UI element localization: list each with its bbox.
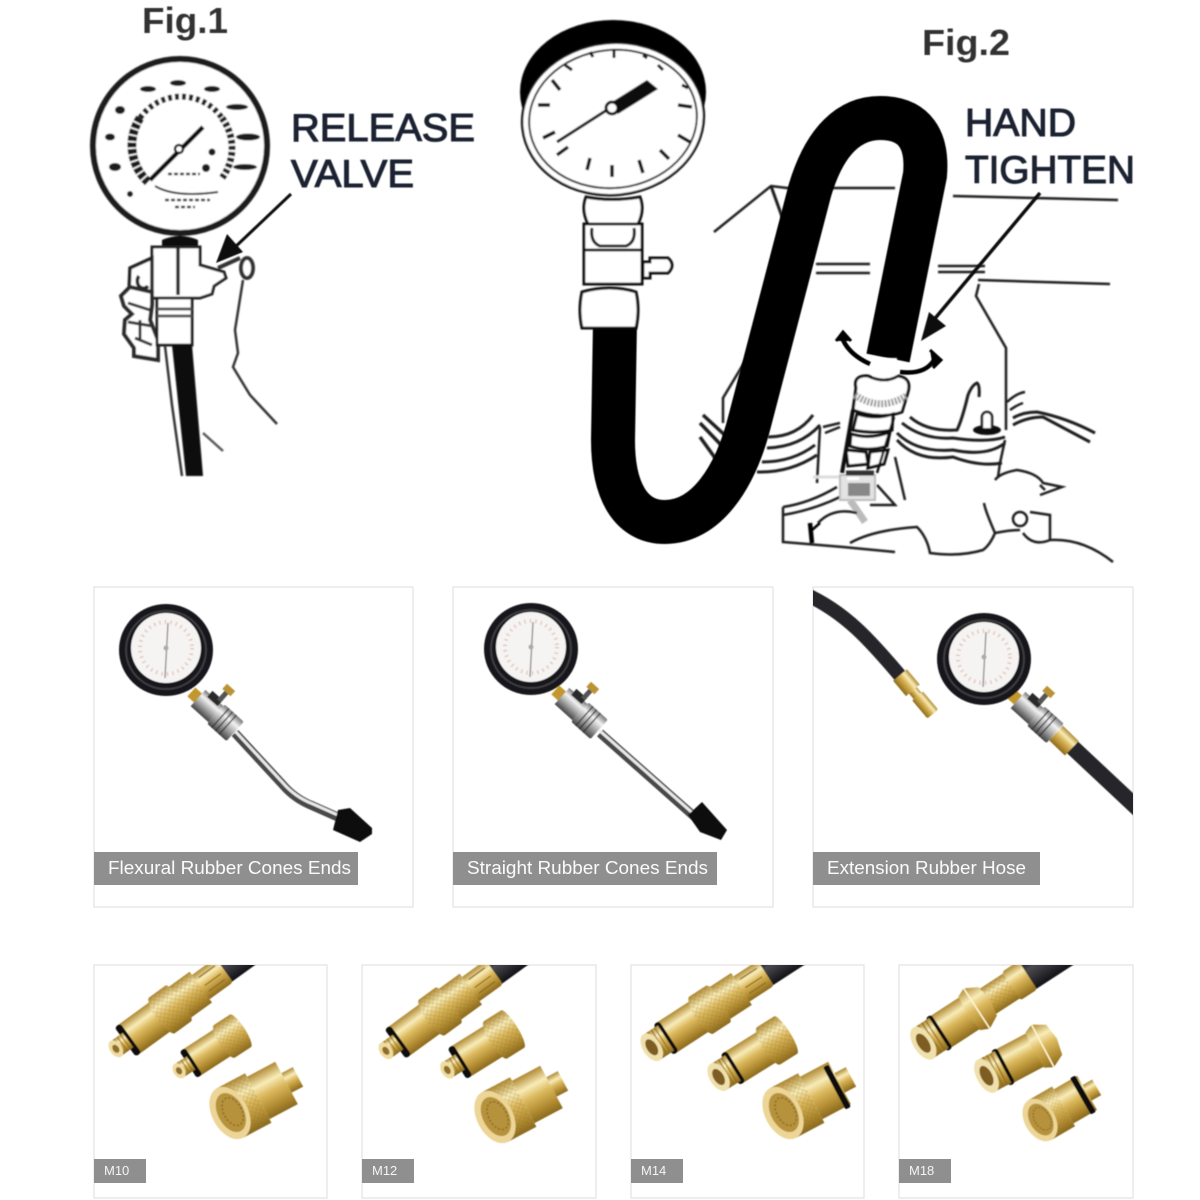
sketch: threaded hose fitting — [840, 358, 909, 500]
tag: M12: M12 — [372, 1163, 397, 1178]
product: M12 brass adapters — [378, 965, 569, 1144]
caption: extension rubber hose: Extension Rubber Hose — [827, 857, 1026, 878]
tag: M18 — [899, 1159, 951, 1183]
panel: straight rubber cones ends — [453, 587, 773, 907]
tag: M12 — [362, 1159, 414, 1183]
panel: M18 adapters — [898, 964, 1134, 1198]
caption: flexural rubber cones ends — [94, 852, 358, 885]
figure 1: release valve diagram — [93, 0, 475, 476]
panel: flexural rubber cones ends — [94, 587, 413, 907]
tag: M14: M14 — [641, 1163, 666, 1178]
product: gauge with bent tube — [119, 604, 372, 842]
label: hand tighten: HAND — [965, 102, 1076, 145]
panel: M10 adapters — [94, 964, 328, 1198]
heading: Fig.1: Fig.1 — [142, 0, 228, 41]
label: release valve: VALVE — [291, 153, 414, 196]
arrow: to release valve — [216, 194, 291, 263]
panel: M12 adapters — [362, 964, 596, 1198]
sketch: gauge with release valve — [93, 59, 277, 476]
product: M10 brass adapters — [108, 965, 304, 1140]
arrow: to hand tighten fitting — [921, 193, 1040, 341]
tag: M14 — [631, 1159, 683, 1183]
caption: straight rubber cones ends — [453, 852, 717, 885]
sketch: black hose — [613, 118, 925, 522]
sketch: fig 2 gauge — [515, 20, 711, 328]
label: hand tighten: TIGHTEN — [965, 149, 1135, 192]
caption: straight rubber cones ends: Straight Rubber Cones Ends — [467, 857, 708, 878]
tag: M10 — [94, 1159, 146, 1183]
label: hand tighten — [965, 102, 1135, 192]
sketch: engine outline — [700, 186, 1118, 562]
tag: M10: M10 — [104, 1163, 129, 1178]
caption: extension rubber hose — [813, 852, 1040, 885]
product: M14 brass adapters — [640, 965, 857, 1140]
panel: M14 adapters — [630, 964, 864, 1198]
product: gauge with straight tube — [484, 603, 727, 840]
label: release valve — [291, 107, 475, 196]
product: M18 brass adapters — [910, 965, 1102, 1142]
figure 2: hand tighten diagram — [515, 20, 1135, 562]
product: detached hose and gauge — [805, 594, 1150, 820]
caption: flexural rubber cones ends: Flexural Rubber Cones Ends — [108, 857, 351, 878]
label: release valve: RELEASE — [291, 107, 475, 150]
tag: M18: M18 — [909, 1163, 934, 1178]
panel: extension rubber hose — [805, 587, 1150, 907]
heading: Fig.2: Fig.2 — [922, 22, 1010, 63]
arrows: hand tighten rotation — [836, 332, 941, 372]
